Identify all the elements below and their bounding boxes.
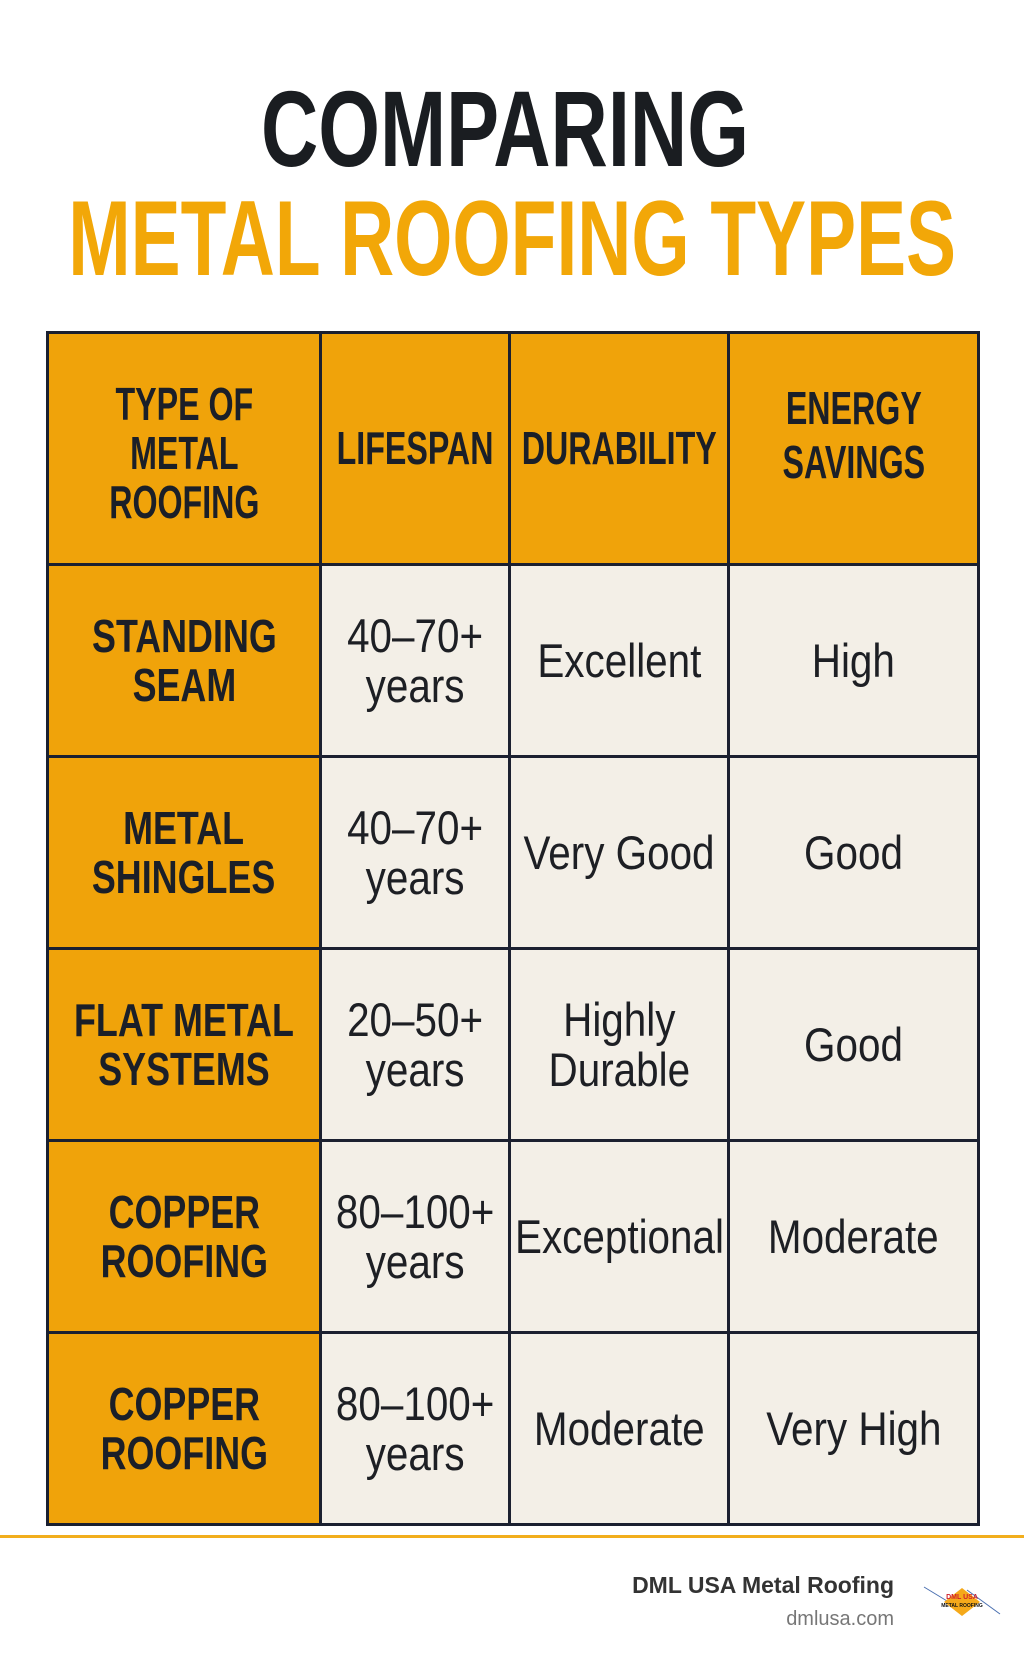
comparison table: Highly: [563, 992, 675, 1046]
orange divider line: [0, 1535, 1024, 1538]
comparison table: 40–70+: [347, 608, 483, 662]
comparison table: METAL: [130, 427, 238, 479]
comparison table: Moderate: [534, 1402, 704, 1454]
comparison table: Exceptional: [515, 1210, 723, 1262]
icon: logo: DML USA: [946, 1594, 978, 1601]
comparison table: years: [366, 1426, 464, 1480]
comparison table: TYPE OF: [115, 378, 253, 430]
comparison table: COPPER: [108, 1186, 260, 1238]
comparison table: ROOFING: [100, 1426, 268, 1478]
comparison table: High: [812, 634, 895, 686]
comparison table: METAL: [124, 802, 244, 854]
comparison table: 40–70+: [347, 800, 483, 854]
comparison table: LIFESPAN: [337, 422, 493, 474]
comparison table: years: [366, 1234, 464, 1288]
comparison table: years: [366, 658, 464, 712]
comparison table: Excellent: [537, 634, 701, 686]
comparison table: SAVINGS: [782, 436, 925, 488]
icon: logo: [924, 1586, 1000, 1616]
comparison table: 80–100+: [336, 1184, 494, 1238]
comparison table: SHINGLES: [92, 850, 276, 902]
comparison table: [46, 331, 980, 1526]
comparison table: years: [366, 850, 464, 904]
comparison table: Durable: [548, 1042, 690, 1096]
comparison table: SEAM: [132, 658, 236, 710]
comparison table: FLAT METAL: [74, 994, 294, 1046]
comparison table: 80–100+: [336, 1376, 494, 1430]
comparison table: years: [366, 1042, 464, 1096]
comparison table: ROOFING: [100, 1234, 268, 1286]
comparison table: Good: [804, 1018, 903, 1070]
comparison table: Very High: [766, 1402, 941, 1454]
comparison table: 20–50+: [347, 992, 483, 1046]
footer url: dmlusa.com: [786, 1608, 894, 1630]
icon: logo: METAL ROOFING: [941, 1603, 983, 1609]
comparison table: COPPER: [108, 1378, 260, 1430]
comparison table: Very Good: [523, 826, 715, 878]
comparison table: DURABILITY: [522, 422, 716, 474]
comparison table: SYSTEMS: [98, 1042, 270, 1094]
comparison table: Good: [804, 826, 903, 878]
subtitle: METAL ROOFING TYPES: [68, 178, 956, 298]
comparison table: STANDING: [92, 610, 276, 662]
title: COMPARING: [261, 68, 749, 189]
comparison table: ENERGY: [785, 382, 921, 434]
footer brand name: DML USA Metal Roofing: [632, 1572, 894, 1598]
comparison table: ROOFING: [109, 476, 259, 528]
comparison table: Moderate: [768, 1210, 939, 1262]
